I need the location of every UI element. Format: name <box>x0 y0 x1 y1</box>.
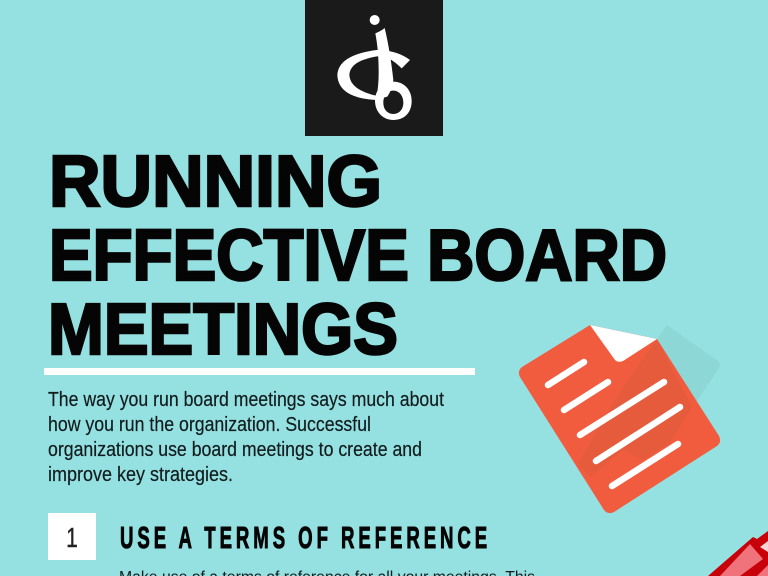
title: MEETINGS <box>48 290 398 370</box>
title underline <box>44 368 475 375</box>
section heading: USE A TERMS OF REFERENCE <box>120 521 487 555</box>
number badge: 1 <box>66 523 78 554</box>
intro text: improve key strategies. <box>48 464 233 486</box>
title <box>48 142 667 370</box>
title: RUNNING <box>49 142 382 222</box>
intro text: organizations use board meetings to create and <box>48 439 422 461</box>
logo block <box>305 0 443 136</box>
intro text: The way you run board meetings says much about <box>48 389 444 411</box>
title: EFFECTIVE BOARD <box>49 216 667 296</box>
number badge <box>48 513 96 560</box>
intro text: how you run the organization. Successful <box>48 414 371 436</box>
intro text <box>48 389 444 486</box>
icon: document <box>519 325 720 513</box>
icon: red pencil <box>708 531 768 576</box>
